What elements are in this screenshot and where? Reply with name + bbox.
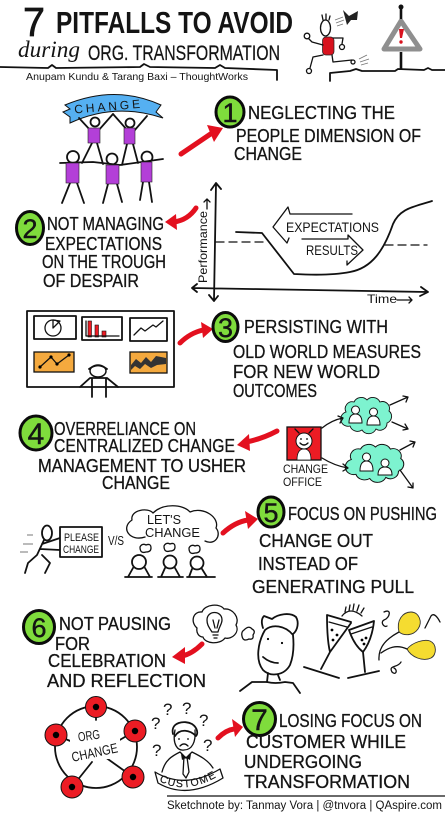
text: pitfall 7: LOSING FOCUS ON xyxy=(279,711,422,731)
icon: champagne glasses xyxy=(304,604,379,678)
text: pitfall 6: FOR xyxy=(55,634,90,654)
text: pitfall 2: EXPECTATIONS xyxy=(45,234,162,254)
subtitle: during org transformation: ORG. TRANSFORMATION xyxy=(88,42,280,65)
arrow: to pitfall 2 xyxy=(165,208,196,230)
arrow: to pitfall 4 xyxy=(237,431,277,451)
badge: number 2 xyxy=(16,212,44,244)
subtitle: during org transformation: during xyxy=(18,37,80,62)
text: pitfall 1: NEGLECTING THE xyxy=(248,103,395,123)
text: pitfall 5: GENERATING PULL xyxy=(252,577,414,597)
icon: change office xyxy=(283,427,328,489)
arrow: to pitfall 6 xyxy=(172,644,202,664)
text: pitfall 5: INSTEAD OF xyxy=(258,554,358,574)
badge: number 1: 1 xyxy=(222,98,238,128)
header underline xyxy=(0,64,277,80)
text: pitfall 3: OUTCOMES xyxy=(233,381,317,401)
chart: performance over time trough xyxy=(192,183,432,306)
icon: org change ring with red nodes: ORG xyxy=(77,727,101,744)
text: pitfall 1 xyxy=(234,103,421,164)
chart: performance over time trough: RESULTS xyxy=(306,242,358,258)
text: pitfall 3: PERSISTING WITH xyxy=(244,317,388,337)
text: pitfall 5 xyxy=(252,504,437,597)
text: pitfall 3 xyxy=(233,317,421,401)
chart: performance over time trough: Performance xyxy=(196,211,210,283)
text: pitfall 2: OF DESPAIR xyxy=(43,271,139,291)
text: pitfall 4: MANAGEMENT TO USHER xyxy=(38,456,246,476)
icon: confused customer xyxy=(151,699,224,792)
text: pitfall 4: OVERRELIANCE ON xyxy=(54,419,196,439)
badge: number 5: 5 xyxy=(263,498,279,528)
icon: running man with flying hat xyxy=(304,10,369,74)
text: pitfall 7: CUSTOMER WHILE xyxy=(246,732,406,752)
badge: number 3 xyxy=(213,312,238,343)
icon: yellow balloons with streamers xyxy=(379,611,440,673)
text: pitfall 7: UNDERGOING xyxy=(244,752,362,772)
arrow: to pitfall 3 xyxy=(180,322,213,343)
icon: dashboard with viewer xyxy=(27,311,174,397)
badge: number 4: 4 xyxy=(28,418,44,451)
badge: number 4 xyxy=(20,416,52,451)
subtitle: during org transformation xyxy=(18,37,280,65)
icon: people pyramid holding change banner xyxy=(60,94,163,203)
icon: man pushing please change sign: PLEASE xyxy=(64,532,99,544)
badge: number 6: 6 xyxy=(31,613,47,643)
text: pitfall 3: OLD WORLD MEASURES xyxy=(233,342,421,362)
badge: number 2: 2 xyxy=(22,214,38,244)
icon: thought cloud with people saying let's change: CHANGE xyxy=(145,526,200,540)
icon: smiling man xyxy=(240,614,300,693)
text: pitfall 2: ON THE TROUGH xyxy=(42,252,166,272)
icon: man pushing please change sign: CHANGE xyxy=(63,544,99,556)
icon: confused customer: ? xyxy=(151,714,160,733)
arrow: to pitfall 7 xyxy=(218,719,243,738)
chart: performance over time trough: EXPECTATIONS xyxy=(286,219,379,235)
text: pitfall 4: CENTRALIZED CHANGE xyxy=(54,436,235,456)
badge: number 6 xyxy=(24,610,54,644)
title: 7 pitfalls to avoid: 7 xyxy=(23,0,45,45)
label: versus: V/S xyxy=(108,533,124,548)
ground line xyxy=(330,68,445,81)
icon: change office: CHANGE xyxy=(283,462,328,476)
icon: thought cloud with people saying let's change xyxy=(125,506,218,577)
authors line: Anupam Kundu & Tarang Baxi – ThoughtWorks xyxy=(26,71,248,83)
text: pitfall 4: CHANGE xyxy=(102,473,170,493)
icon: confused customer: ? xyxy=(163,700,172,719)
arrow: to pitfall 5 xyxy=(223,511,258,533)
chart: performance over time trough: Time xyxy=(367,292,397,306)
icon: man pushing please change sign xyxy=(20,526,102,573)
title: 7 pitfalls to avoid: PITFALLS TO AVOID xyxy=(56,5,293,40)
icon: change office: OFFICE xyxy=(283,475,322,489)
badge: number 7 xyxy=(244,702,276,737)
badge: number 5 xyxy=(258,497,284,528)
text: pitfall 7 xyxy=(244,711,422,792)
icon: confused customer: ? xyxy=(199,711,208,730)
text: pitfall 2: NOT MANAGING xyxy=(47,214,164,234)
icon: confused customer: ? xyxy=(152,741,161,760)
text: pitfall 4 xyxy=(38,419,246,493)
badge: number 7: 7 xyxy=(251,704,268,737)
icon: thought cloud with people saying let's change: LET'S xyxy=(147,513,181,527)
icon: org change ring with red nodes: CHANGE xyxy=(70,740,119,765)
text: pitfall 6: NOT PAUSING xyxy=(59,614,171,634)
text: pitfall 5: CHANGE OUT xyxy=(259,531,373,551)
badge: number 3: 3 xyxy=(218,313,233,343)
text: pitfall 6: CELEBRATION xyxy=(48,651,166,671)
icon: confused customer: ? xyxy=(203,736,212,755)
text: pitfall 3: FOR NEW WORLD xyxy=(233,362,380,382)
title: 7 pitfalls to avoid xyxy=(23,0,293,45)
icon: org change ring with red nodes xyxy=(45,696,146,798)
icon: warning sign xyxy=(384,4,420,70)
footer rule xyxy=(167,795,445,797)
credit line: Sketchnote by: Tanmay Vora | @tnvora | QAspire.com xyxy=(167,800,442,812)
text: pitfall 6 xyxy=(47,614,206,691)
text: pitfall 1: PEOPLE DIMENSION OF xyxy=(236,126,421,146)
text: pitfall 2 xyxy=(42,214,166,291)
icon: thought cloud with light bulb xyxy=(193,605,254,643)
icon: teal team clouds with arrows xyxy=(322,396,415,488)
arrow: to pitfall 1 xyxy=(181,125,223,154)
icon: people pyramid holding change banner: CHANGE xyxy=(74,97,141,117)
text: pitfall 1: CHANGE xyxy=(234,144,302,164)
text: pitfall 7: TRANSFORMATION xyxy=(244,772,410,792)
icon: confused customer: ? xyxy=(182,699,191,718)
text: pitfall 6: AND REFLECTION xyxy=(47,671,206,691)
badge: number 1 xyxy=(216,97,244,128)
